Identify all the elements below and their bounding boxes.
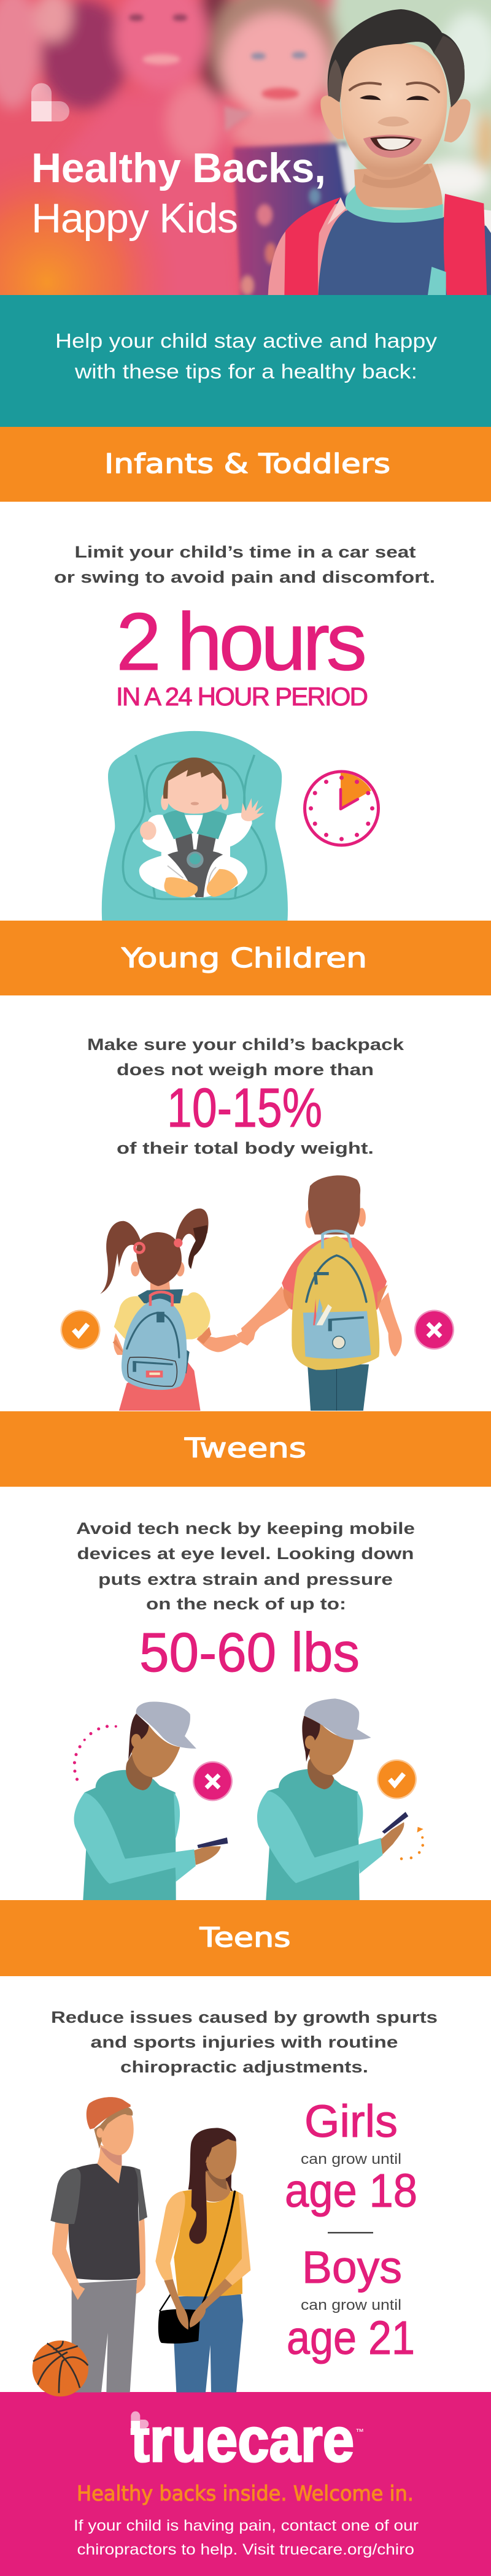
- text: tech neck advice: Avoid tech neck by keeping mobile: [76, 1519, 415, 1538]
- panel: intro text: Help your child stay active and happy: [55, 329, 438, 352]
- text: chiropractic advice: Reduce issues caused by growth spurts: [51, 2008, 438, 2026]
- photo: smiling boy with backpack: [268, 9, 491, 296]
- stat: girls and boys growth ages: Boys: [302, 2242, 402, 2293]
- figure: girl: [100, 1208, 257, 1411]
- illustration: teens with basketball: [33, 2097, 250, 2396]
- icon: clock: [304, 772, 378, 845]
- stat: 50-60 lbs: 50-60 lbs: [139, 1622, 360, 1684]
- call to action text: [74, 2517, 419, 2558]
- logo: heart mark: [31, 83, 69, 121]
- panel: intro text: [0, 295, 491, 427]
- figure: teen girl: [155, 2128, 250, 2393]
- logo: truecare: ™: [355, 2427, 364, 2436]
- illustration: tween looking down at phone: [73, 1701, 228, 1901]
- illustration: girl and boy with backpacks: [100, 1175, 402, 1411]
- text: backpack advice: [87, 1035, 404, 1157]
- text: backpack advice: Make sure your child’s backpack: [87, 1035, 404, 1054]
- panel: intro text: with these tips for a healthy back:: [74, 360, 417, 383]
- icon: orange check badge: [60, 1310, 101, 1349]
- stat: 10-15%: 10-15%: [167, 1078, 322, 1139]
- stat: girls and boys growth ages: can grow until: [301, 2151, 401, 2168]
- text: chiropractic advice: and sports injuries with routine: [91, 2033, 398, 2051]
- panel: section header Tweens: Tweens: [184, 1433, 306, 1464]
- tagline: Healthy backs inside. Welcome in.: [77, 2482, 414, 2506]
- stat: girls and boys growth ages: [285, 2096, 417, 2364]
- stat: 2 hours: 2 hours: [116, 597, 367, 688]
- title: Healthy Backs,: [31, 145, 326, 191]
- icon: pink x badge: [414, 1310, 454, 1349]
- panel: section header Infants and Toddlers: Infants & Toddlers: [104, 448, 390, 480]
- text: chiropractic advice: [51, 2008, 438, 2076]
- stat: 2 hours: IN A 24 HOUR PERIOD: [116, 682, 368, 711]
- logo: truecare: truecare: [131, 2405, 354, 2475]
- stat: girls and boys growth ages: age 18: [285, 2164, 417, 2217]
- text: car seat advice: or swing to avoid pain and discomfort.: [54, 568, 435, 586]
- panel: section header Teens: [0, 1900, 491, 1976]
- text: tech neck advice: puts extra strain and pressure: [98, 1570, 393, 1589]
- panel: section header Infants and Toddlers: [0, 427, 491, 502]
- title: [31, 145, 326, 242]
- panel: hero photo banner: [0, 0, 491, 315]
- text: chiropractic advice: chiropractic adjustments.: [120, 2058, 368, 2076]
- panel: footer: [0, 2392, 491, 2576]
- icon: pink x badge: [193, 1761, 233, 1801]
- panel: section header Young Children: [0, 921, 491, 995]
- text: backpack advice: does not weigh more than: [117, 1060, 374, 1079]
- panel: section header Young Children: Young Children: [121, 943, 367, 974]
- text: car seat advice: Limit your child’s time in a car seat: [75, 543, 416, 561]
- icon: orange check badge: [377, 1759, 417, 1800]
- illustration: baby in car seat: [102, 731, 288, 922]
- stat: girls and boys growth ages: age 21: [287, 2312, 415, 2364]
- stat: girls and boys growth ages: Girls: [304, 2096, 398, 2147]
- icon: basketball: [33, 2340, 88, 2396]
- stat: girls and boys growth ages: can grow until: [301, 2297, 401, 2313]
- figure: teen boy: [50, 2097, 147, 2393]
- title: Happy Kids: [31, 195, 238, 242]
- call to action text: chiropractors to help. Visit truecare.org/chiro: [77, 2541, 414, 2558]
- text: tech neck advice: devices at eye level. Looking down: [77, 1544, 414, 1563]
- call to action text: If your child is having pain, contact one of our: [74, 2517, 419, 2534]
- illustration: tween holding phone at eye level: [257, 1698, 424, 1901]
- figure: boy: [241, 1175, 402, 1411]
- panel: section header Teens: Teens: [199, 1922, 291, 1953]
- text: tech neck advice: [76, 1519, 415, 1613]
- text: tech neck advice: on the neck of up to:: [146, 1595, 346, 1613]
- text: car seat advice: [54, 543, 435, 586]
- panel: section header Tweens: [0, 1411, 491, 1487]
- text: backpack advice: of their total body weight.: [117, 1139, 374, 1157]
